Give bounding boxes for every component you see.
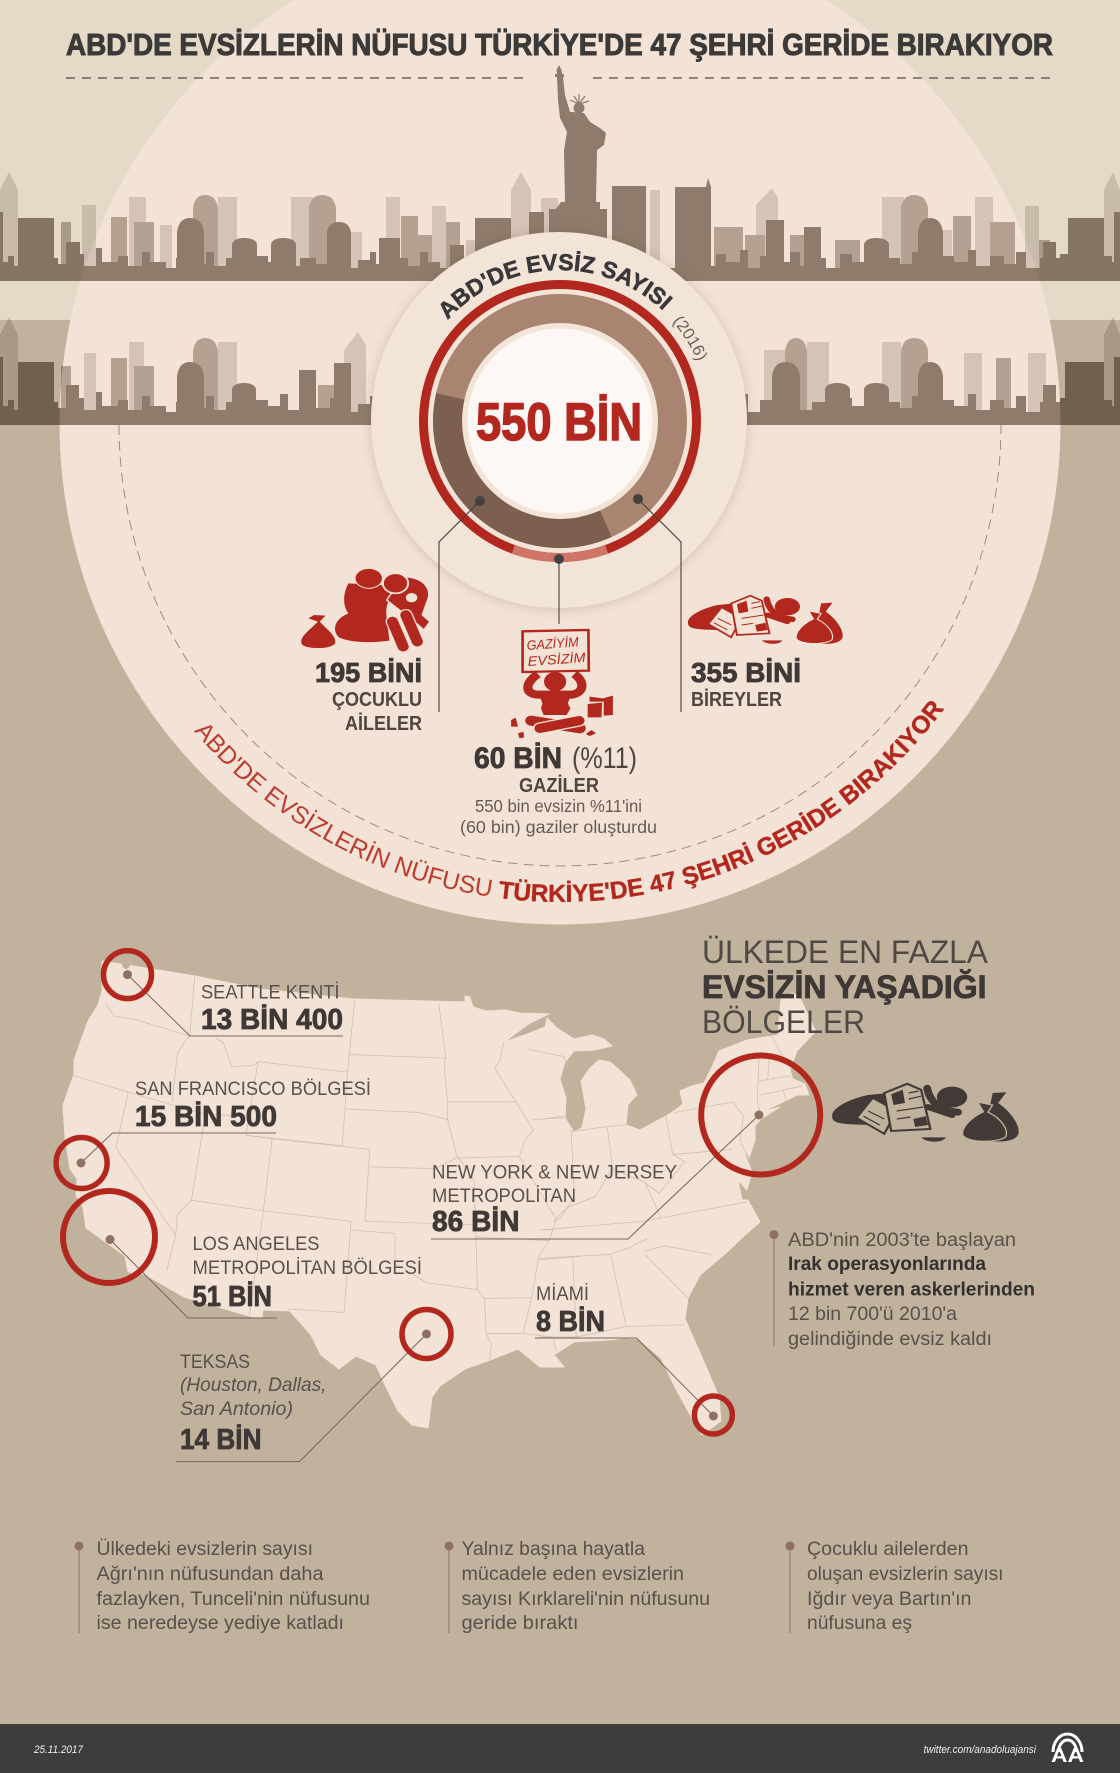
icon: veteran with sign: EVSİZİM — [527, 650, 587, 669]
footer date: 25.11.2017 — [33, 1744, 84, 1756]
skyline: upper city with Statue of Liberty — [0, 65, 1120, 281]
marker: Seattle — [104, 951, 343, 1036]
callout: Iraq veterans: hizmet veren askerlerinden — [788, 1280, 1035, 1301]
stat: families: ÇOCUKLU — [332, 689, 422, 711]
stat: veterans: 60 BİN — [474, 742, 562, 775]
label: Seattle: 13 BİN 400 — [201, 1004, 343, 1036]
fact: comparison with Ağrı and Tunceli: Ağrı'nın nüfusundan daha — [96, 1564, 324, 1585]
stat: individuals: 355 BİNİ — [691, 657, 801, 688]
map: United States — [63, 959, 816, 1435]
marker: Texas — [176, 1310, 451, 1462]
stat: veterans: 550 bin evsizin %11'ini — [475, 796, 642, 816]
label: Texas: San Antonio) — [180, 1398, 293, 1420]
fact: comparison with Iğdır and Bartın: nüfusuna eş — [807, 1613, 912, 1634]
icon: veteran with sign: GAZİYİM — [526, 634, 580, 653]
fact: comparison with Iğdır and Bartın: oluşan evsizlerin sayısı — [807, 1564, 1004, 1585]
stat: individuals: BİREYLER — [691, 688, 782, 711]
fact: comparison with Ağrı and Tunceli: fazlayken, Tunceli'nin nüfusunu — [96, 1589, 370, 1610]
fact: comparison with Iğdır and Bartın: Iğdır veya Bartın'ın — [807, 1589, 972, 1610]
label: Los Angeles: LOS ANGELES — [192, 1233, 320, 1255]
label: New York: NEW YORK & NEW JERSEY — [432, 1161, 677, 1183]
fact: comparison with Kırklareli: mücadele eden evsizlerin — [462, 1564, 684, 1585]
leader lines from donut — [439, 494, 681, 712]
icon: sleeping person with newspaper (dark) — [832, 1084, 1019, 1142]
stat: families — [315, 657, 422, 735]
stat: families: AİLELER — [345, 712, 422, 735]
callout: Iraq veterans: 12 bin 700'ü 2010'a — [788, 1304, 957, 1325]
label: New York — [432, 1161, 677, 1238]
callout: Iraq veterans: Irak operasyonlarında — [788, 1254, 986, 1275]
label: Miami — [536, 1282, 605, 1338]
stat: families: 195 BİNİ — [315, 657, 422, 688]
label: Los Angeles — [192, 1233, 422, 1313]
callout: Iraq veterans — [770, 1230, 1035, 1350]
icon: Statue of Liberty — [549, 65, 607, 240]
label: San Francisco: SAN FRANCISCO BÖLGESİ — [135, 1077, 371, 1100]
marker: Los Angeles — [63, 1191, 277, 1318]
stat: veterans: (60 bin) gaziler oluşturdu — [460, 817, 657, 837]
stat: veterans: (%11) — [572, 742, 637, 775]
label: New York: METROPOLİTAN — [432, 1184, 576, 1207]
icon: agency logo — [1051, 1734, 1084, 1767]
fact: comparison with Ağrı and Tunceli: ise neredeyse yediye katladı — [96, 1613, 344, 1634]
panel: large light circle — [60, 0, 1060, 924]
fact: comparison with Ağrı and Tunceli: Ülkedeki evsizlerin sayısı — [96, 1539, 313, 1560]
title: ABD'DE EVSİZLERİN NÜFUSU TÜRKİYE'DE 47 ŞEHRİ GERİDE BIRAKIYOR — [66, 27, 1053, 62]
heading: regions — [702, 934, 989, 1040]
skyline: lower city — [0, 317, 1120, 425]
label: Seattle: SEATTLE KENTİ — [201, 980, 340, 1003]
callout: Iraq veterans: ABD'nin 2003'te başlayan — [788, 1230, 1016, 1251]
label: New York: 86 BİN — [432, 1206, 520, 1238]
total number: 550 BİN — [476, 393, 642, 452]
fact: comparison with Kırklareli: geride bıraktı — [462, 1613, 578, 1634]
stat: veterans — [460, 742, 657, 837]
dashed arc — [119, 425, 1001, 866]
map: eastern state borders — [540, 1035, 802, 1337]
fact: comparison with Iğdır and Bartın — [786, 1539, 1004, 1634]
heading: regions: ÜLKEDE EN FAZLA — [702, 934, 989, 970]
stat: veterans: GAZİLER — [519, 774, 600, 797]
icon: agency logo: AA — [1051, 1745, 1084, 1767]
label: Texas: TEKSAS — [180, 1351, 250, 1373]
label: San Francisco: 15 BİN 500 — [135, 1101, 277, 1133]
heading: regions: EVSİZİN YAŞADIĞI — [702, 969, 986, 1005]
icon: veteran with sign — [511, 630, 613, 738]
marker: San Francisco — [56, 1133, 276, 1188]
footer — [0, 1724, 1120, 1773]
curved red banner text: ABD'DE EVSİZLERİN NÜFUSU TÜRKİYE'DE 47 ŞEHRİ GERİDE BIRAKIYOR — [194, 701, 944, 902]
footer social handle: twitter.com/anadoluajansi — [924, 1744, 1036, 1756]
curved heading: ABD'DE EVSİZ SAYISI — [440, 250, 673, 320]
icon: sleeping person with newspaper (red) — [688, 596, 843, 644]
panel: inner disk with donut chart — [366, 230, 752, 614]
label: Los Angeles: METROPOLİTAN BÖLGESİ — [192, 1256, 422, 1279]
marker: Miami — [535, 1338, 732, 1434]
label: San Francisco — [135, 1077, 371, 1133]
curved year: (2016) — [672, 316, 707, 360]
fact: comparison with Kırklareli: Yalnız başına hayatla — [462, 1539, 645, 1560]
donut: brown share ring — [448, 308, 672, 534]
stat: individuals — [691, 657, 801, 711]
label: Los Angeles: 51 BİN — [192, 1281, 272, 1313]
callout: Iraq veterans: gelindiğinde evsiz kaldı — [788, 1329, 992, 1350]
label: Texas: 14 BİN — [180, 1424, 262, 1456]
label: Miami: 8 BİN — [536, 1306, 605, 1338]
fact: comparison with Ağrı and Tunceli — [74, 1539, 370, 1634]
label: Seattle — [201, 980, 343, 1036]
fact: comparison with Iğdır and Bartın: Çocuklu ailelerden — [807, 1539, 968, 1560]
heading: regions: BÖLGELER — [702, 1004, 865, 1040]
fact: comparison with Kırklareli — [444, 1539, 710, 1634]
marker: New York — [431, 1056, 820, 1239]
donut: red outer ring — [424, 284, 696, 558]
label: Texas — [180, 1351, 326, 1456]
label: Miami: MİAMİ — [536, 1282, 589, 1305]
fact: comparison with Kırklareli: sayısı Kırklareli'nin nüfusunu — [462, 1589, 710, 1610]
donut center: white disc — [468, 328, 652, 514]
icon: family — [301, 568, 430, 648]
map: western and central state borders — [74, 976, 580, 1360]
label: Texas: (Houston, Dallas, — [180, 1374, 326, 1396]
